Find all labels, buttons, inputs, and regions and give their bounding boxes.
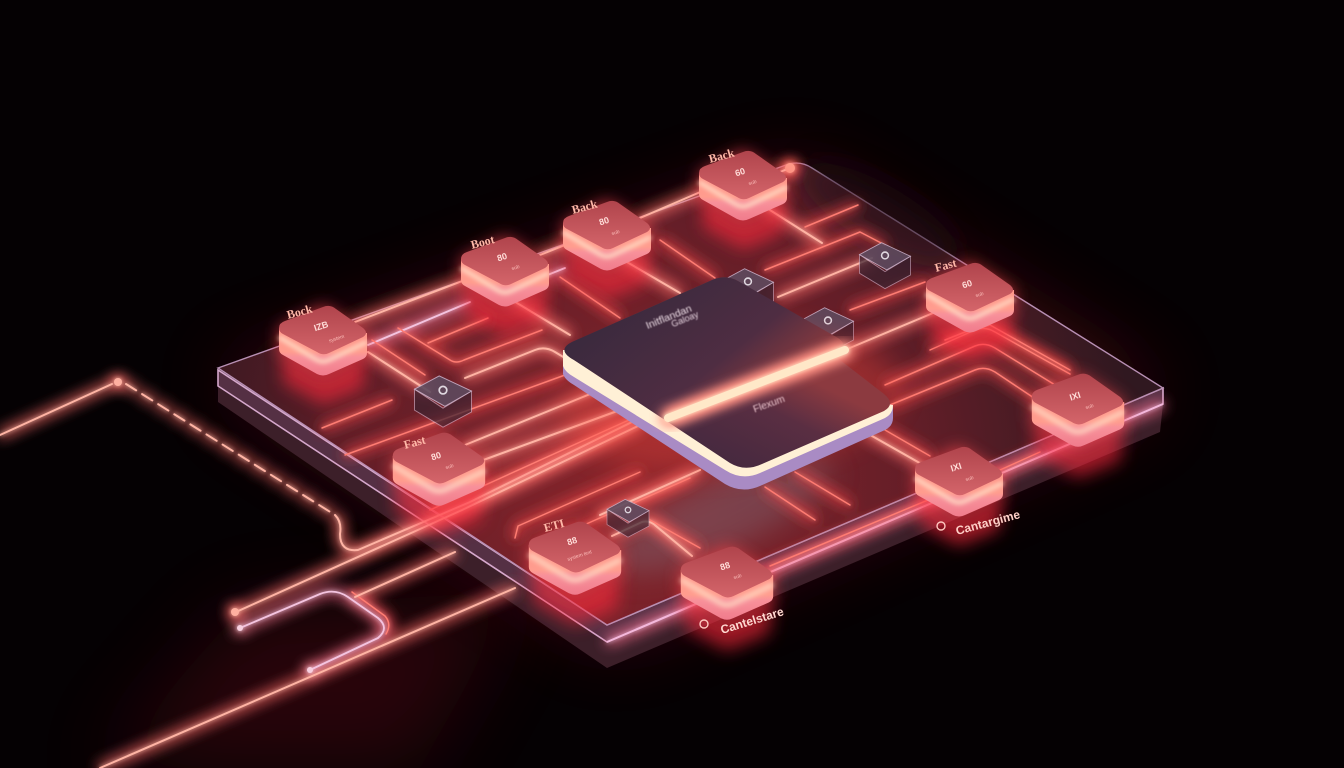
icon: small ring marks bbox=[700, 522, 945, 628]
module 7: IXI bbox=[949, 461, 963, 474]
module 2 bbox=[461, 232, 549, 336]
module 9 bbox=[529, 516, 621, 626]
module 5: Fast bbox=[933, 256, 958, 275]
panel: glass circuit plate bbox=[218, 144, 1163, 642]
ambient red glow bbox=[100, 170, 1163, 768]
module 8: Fast bbox=[402, 433, 427, 452]
module 9: 88 bbox=[566, 535, 578, 547]
module 8: sub bbox=[445, 463, 455, 471]
module 2: Boot bbox=[469, 232, 496, 252]
module 6: sub bbox=[1085, 403, 1095, 411]
module 5: 60 bbox=[961, 278, 973, 290]
module 1 bbox=[279, 302, 367, 405]
module 1: Bock bbox=[285, 302, 314, 322]
module 9: ETI bbox=[542, 516, 566, 535]
off-plate circuit traces bbox=[0, 378, 640, 768]
module 8: 80 bbox=[430, 450, 442, 462]
chip subheading: Galoay bbox=[670, 309, 700, 329]
chip heading: Initflandan bbox=[644, 303, 694, 332]
module 6: IXI bbox=[1068, 390, 1082, 403]
module 7: Cantargime bbox=[954, 507, 1022, 538]
icon: small glass cubes bbox=[414, 243, 910, 537]
module 9: system text bbox=[567, 549, 593, 563]
module 4 bbox=[699, 146, 787, 250]
module 2: 80 bbox=[496, 251, 508, 263]
module 4: sub bbox=[748, 179, 758, 187]
central processor chip bbox=[555, 277, 905, 490]
glowing seam bbox=[668, 350, 845, 418]
module 4: 60 bbox=[734, 166, 746, 178]
module 6 bbox=[1032, 373, 1124, 478]
module 1: IZB bbox=[313, 319, 330, 333]
on-plate circuit traces bbox=[322, 163, 1070, 600]
module 10: Cantelstare bbox=[719, 604, 786, 637]
module 10: 88 bbox=[719, 560, 731, 572]
module 3: 80 bbox=[598, 215, 610, 227]
module 3 bbox=[563, 197, 651, 300]
module 1: system bbox=[328, 334, 345, 344]
module 4: Back bbox=[707, 146, 736, 166]
module 5: sub bbox=[975, 291, 985, 299]
module 2: sub bbox=[511, 264, 521, 272]
module 3: Back bbox=[570, 197, 599, 217]
chip lower label: Flexum bbox=[752, 394, 786, 415]
module 10 bbox=[681, 546, 786, 651]
module 10: sub bbox=[733, 573, 743, 581]
module 3: sub bbox=[611, 229, 621, 237]
plate reflection shadow bbox=[218, 387, 1163, 668]
module 7 bbox=[915, 446, 1022, 546]
module 8 bbox=[393, 432, 485, 537]
module 7: sub bbox=[965, 475, 975, 483]
module 5 bbox=[926, 256, 1014, 362]
